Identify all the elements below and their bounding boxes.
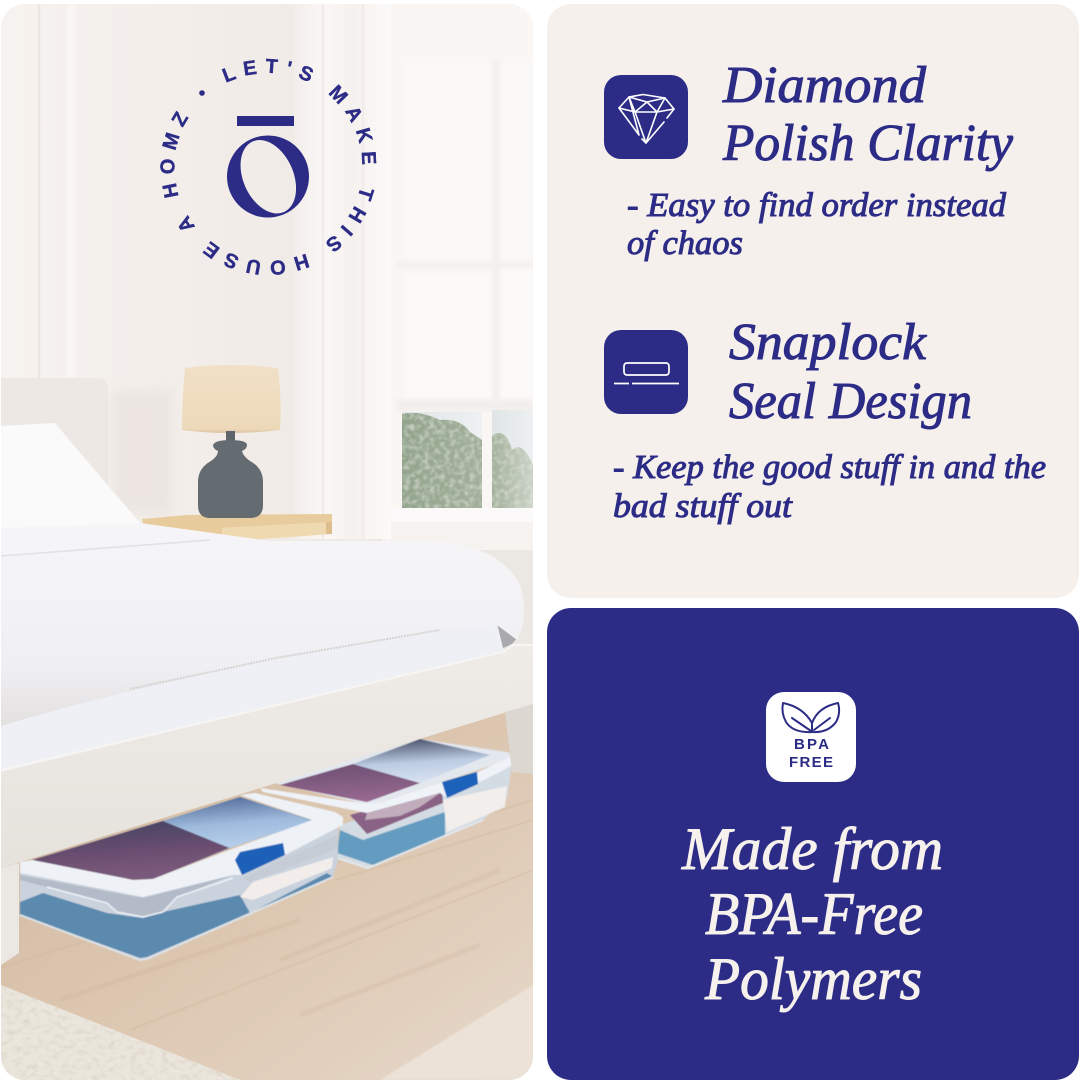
pillow [1,423,141,532]
panel: features [547,4,1079,598]
heading: diamond polish clarity [722,57,1014,172]
text: easy to find [627,187,1007,262]
text: easy to find: - Easy to find order instead [627,187,1007,224]
icon: diamond [604,75,688,159]
icon: BPA free: FREE [789,754,833,771]
heading: diamond polish clarity: Polish Clarity [722,115,1014,172]
storage box: back [260,739,517,868]
nightstand [142,514,332,542]
headboard [1,378,108,480]
rug [1,985,240,1080]
bed legs [1,704,533,965]
storage box: front [20,793,343,960]
heading: made from BPA-free polymers [681,816,943,1012]
heading: diamond polish clarity: Diamond [722,57,927,114]
text: keep the good stuff: - Keep the good stuff in and the [613,449,1046,486]
logo mark [227,116,309,218]
window [382,4,533,550]
icon: snaplock [604,330,688,414]
heading: made from BPA-free polymers: Made from [681,816,943,882]
panel: BPA free [547,608,1079,1080]
duvet [1,523,524,726]
bed frame rail [1,645,533,868]
heading: snaplock seal design [729,314,972,430]
curtain [305,4,391,539]
icon: BPA free [766,692,856,782]
sheet tab [498,626,516,648]
text: keep the good stuff [613,449,1046,525]
icon: BPA free: BPA [794,736,829,753]
heading: snaplock seal design: Snaplock [729,314,927,371]
bed sheet [76,625,504,754]
floor [0,700,533,1080]
circular slogan: LET'S MAKE THIS HOUSE A HOMZ [160,58,376,275]
table lamp [182,365,281,518]
heading: snaplock seal design: Seal Design [729,373,972,430]
text: easy to find: of chaos [627,225,743,262]
heading: made from BPA-free polymers: Polymers [704,946,922,1012]
heading: made from BPA-free polymers: BPA-Free [705,881,923,947]
panel: bedroom photo [0,4,533,1080]
logo badge [160,58,376,275]
text: keep the good stuff: bad stuff out [613,488,794,525]
